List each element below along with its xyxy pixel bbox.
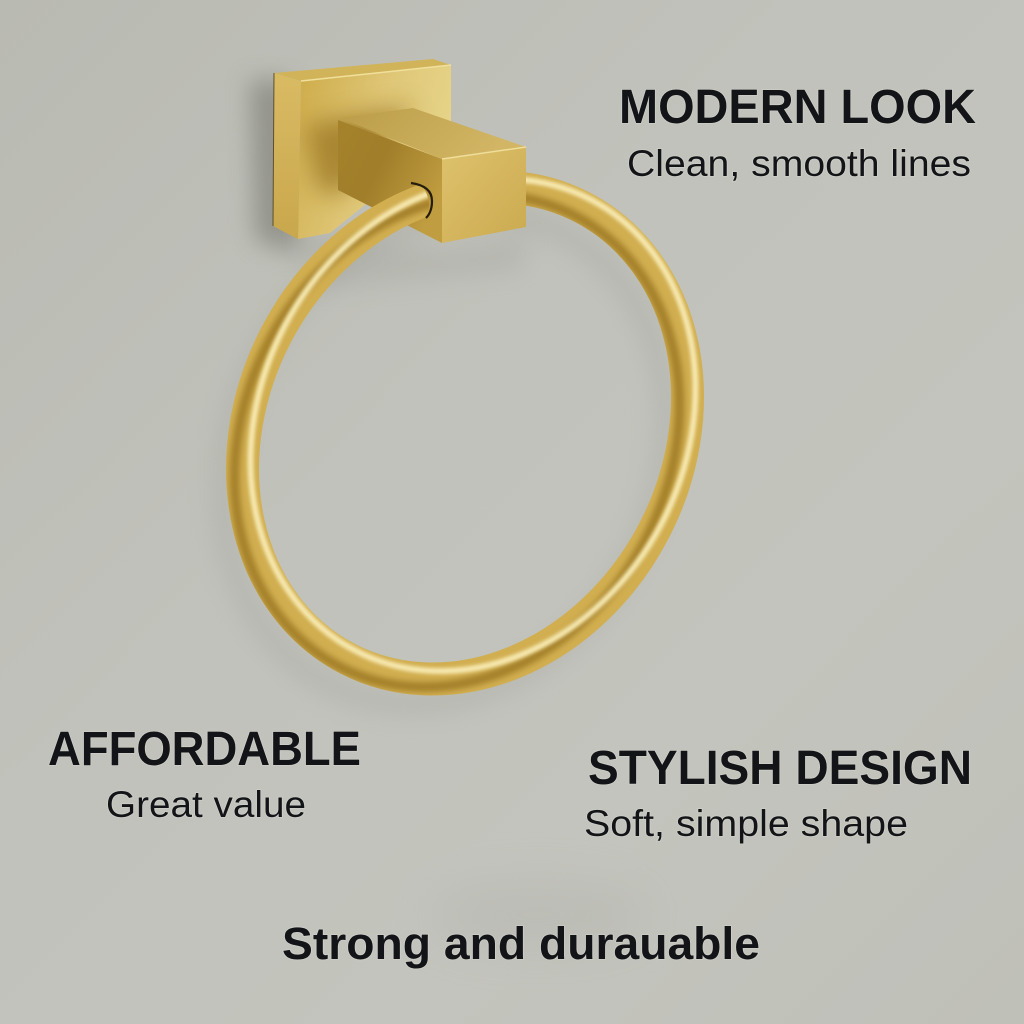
heading: STYLISH DESIGN: [588, 742, 972, 795]
ring collar: [411, 183, 432, 218]
heading: MODERN LOOK: [619, 81, 976, 134]
mounting bracket: [272, 59, 526, 300]
towel ring: [150, 101, 780, 765]
wall shadows: [139, 80, 751, 945]
subtext: Soft, simple shape: [584, 803, 908, 844]
label: strong and durable: Strong and durauable: [282, 918, 760, 969]
bracket arm top: [340, 108, 526, 159]
subtext: Clean, smooth lines: [627, 143, 971, 184]
label: affordable: [48, 723, 361, 825]
label: stylish design: [584, 742, 972, 844]
wall plate: [273, 59, 451, 239]
ring section in front of bracket: [278, 186, 429, 300]
subtext: Great value: [106, 784, 306, 825]
bracket arm side: [338, 120, 442, 243]
label: modern look: [619, 81, 976, 184]
heading: AFFORDABLE: [48, 723, 361, 776]
bracket arm front face: [442, 147, 526, 243]
